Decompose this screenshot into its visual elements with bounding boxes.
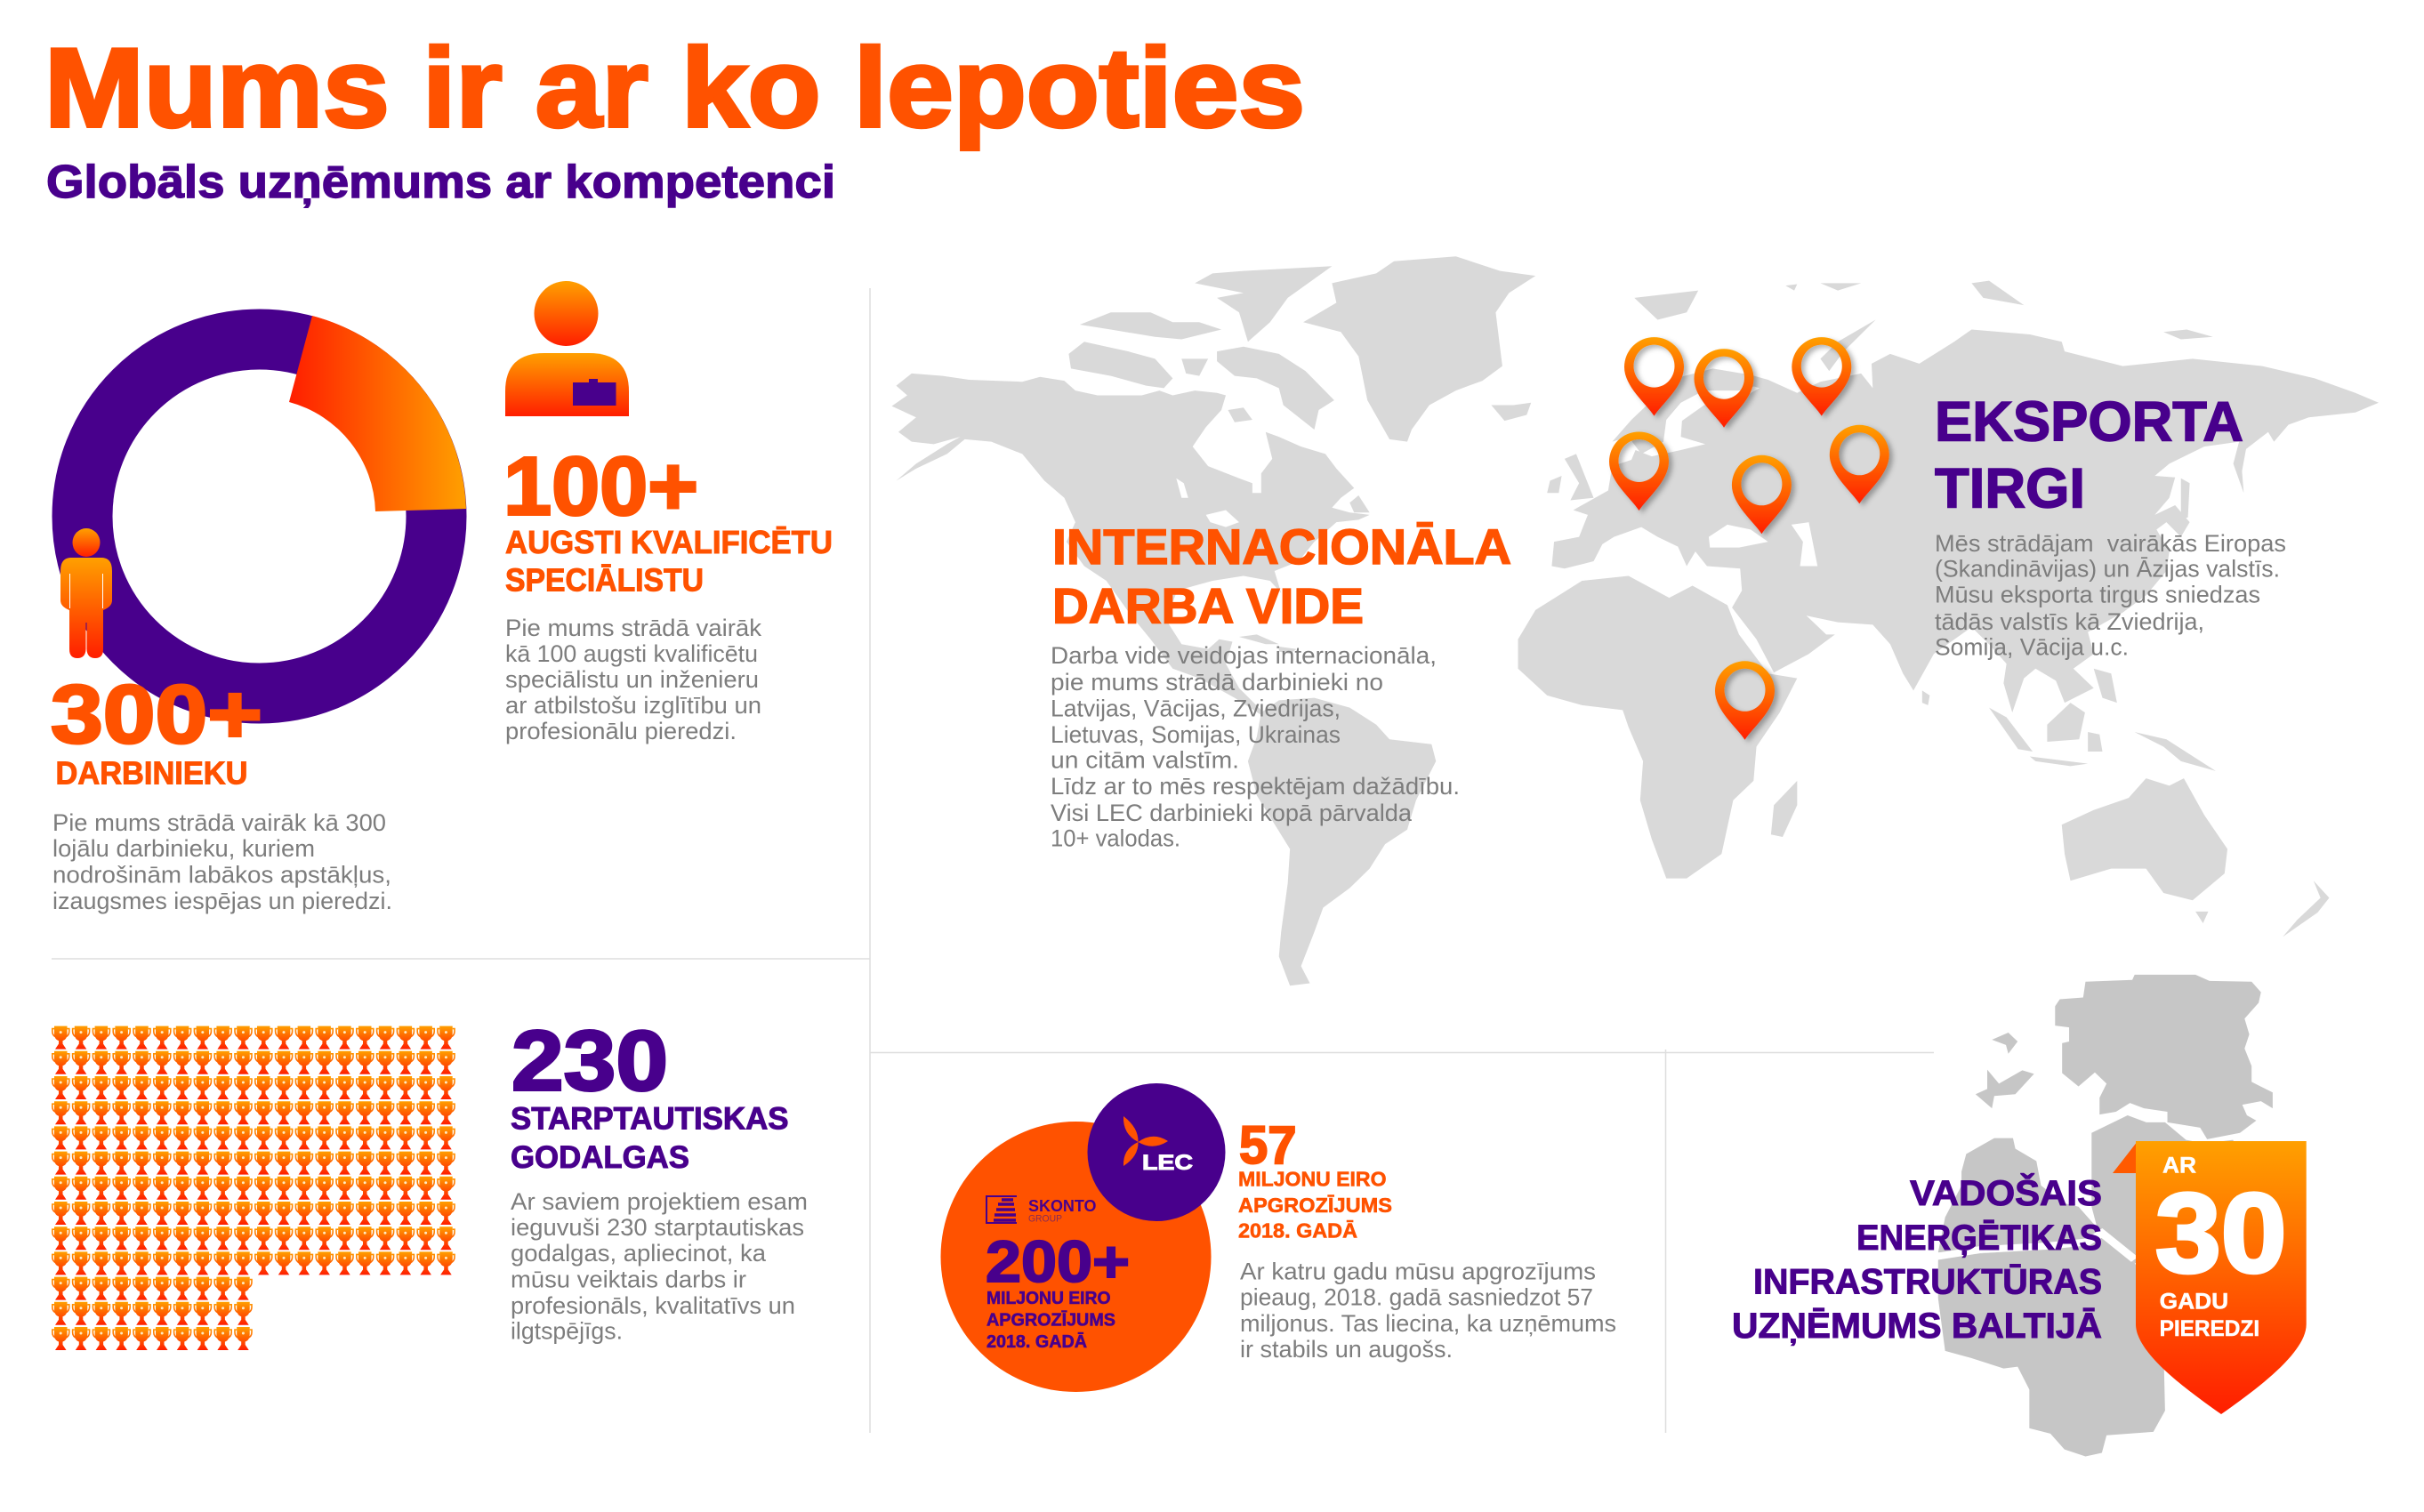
text: specialists description bbox=[505, 615, 762, 744]
badge: 30 years: 30 bbox=[2155, 1170, 2286, 1296]
heading: leading company bbox=[1732, 1172, 2102, 1346]
text: specialists description: ar atbilstošu izglītību un bbox=[505, 692, 761, 719]
text: work environment description bbox=[1051, 642, 1460, 851]
label: awards: GODALGAS bbox=[511, 1140, 689, 1175]
label: specialists: AUGSTI KVALIFICĒTU bbox=[505, 524, 833, 560]
panel: baltic leader bbox=[1732, 1141, 2307, 1414]
logo: lec wordmark: LEC bbox=[1142, 1151, 1193, 1175]
text: turnover description bbox=[1240, 1259, 1616, 1363]
logo: skonto group: SKONTO bbox=[1028, 1197, 1096, 1215]
heading bbox=[1052, 519, 1511, 634]
text: work environment description: Lietuvas, Somijas, Ukrainas bbox=[1051, 721, 1341, 748]
number: 200+: 200+ bbox=[986, 1228, 1130, 1294]
number: 230: 230 bbox=[511, 1014, 668, 1108]
heading: leading company: VADOŠAIS bbox=[1910, 1172, 2102, 1213]
heading: leading company: INFRASTRUKTŪRAS bbox=[1753, 1262, 2102, 1301]
world map bbox=[891, 256, 2379, 985]
text: specialists description: speciālistu un inženieru bbox=[505, 666, 759, 693]
trophy grid bbox=[52, 1026, 455, 1350]
text: export description: (Skandināvijas) un Āzijas valstīs. bbox=[1935, 556, 2280, 583]
text: work environment description: Līdz ar to mēs respektējam dažādību. bbox=[1051, 773, 1460, 800]
baltic map bbox=[1936, 975, 2273, 1457]
text: employees description: lojālu darbinieku, kuriem bbox=[52, 835, 315, 862]
text: employees description: Pie mums strādā vairāk kā 300 bbox=[52, 809, 386, 836]
text: export description: Somija, Vācija u.c. bbox=[1935, 633, 2129, 660]
label: lec turnover: 2018. GADĀ bbox=[1238, 1219, 1357, 1243]
label: darbinieku: DARBINIEKU bbox=[55, 754, 247, 792]
badge: 30 years: GADU bbox=[2160, 1289, 2228, 1314]
panel: awards bbox=[52, 1014, 808, 1350]
panel: turnover bbox=[941, 1083, 1616, 1392]
text: awards description: mūsu veiktais darbs ir bbox=[511, 1267, 746, 1293]
logo: skonto group bbox=[987, 1196, 1096, 1225]
text: awards description: ilgtspējīgs. bbox=[511, 1318, 623, 1345]
skonto circle bbox=[941, 1122, 1212, 1392]
text: turnover description: ir stabils un augošs. bbox=[1240, 1336, 1453, 1363]
label: specialists: SPECIĀLISTU bbox=[505, 562, 704, 598]
text: awards description: Ar saviem projektiem esam bbox=[511, 1188, 808, 1215]
number: 300+: 300+ bbox=[51, 668, 262, 760]
badge: 30 years: AR bbox=[2162, 1153, 2196, 1178]
label: lec turnover: MILJONU EIRO bbox=[1238, 1167, 1386, 1190]
text: employees description: izaugsmes iespējas un pieredzi. bbox=[52, 888, 392, 914]
heading: INTERNACIONĀLA bbox=[1052, 519, 1511, 575]
heading: leading company: ENERĢĒTIKAS bbox=[1856, 1218, 2102, 1258]
title: Mums ir ar ko lepoties bbox=[44, 25, 1305, 150]
text: specialists description: profesionālu pieredzi. bbox=[505, 718, 737, 744]
text: employees description: nodrošinām labākos apstākļus, bbox=[52, 861, 391, 888]
label: lec turnover: APGROZĪJUMS bbox=[1238, 1194, 1392, 1217]
heading bbox=[1935, 391, 2243, 520]
subtitle: Globāls uzņēmums ar kompetenci bbox=[46, 157, 835, 208]
logo: lec turbine bbox=[1123, 1116, 1168, 1166]
text: awards description: godalgas, apliecinot, ka bbox=[511, 1240, 767, 1267]
badge: 30 years bbox=[2113, 1141, 2307, 1414]
icon: person bbox=[60, 528, 112, 658]
text: specialists description: kā 100 augsti kvalificētu bbox=[505, 640, 758, 667]
label: awards: STARPTAUTISKAS bbox=[511, 1101, 788, 1137]
text: work environment description: un citām valstīm. bbox=[1051, 747, 1239, 774]
label: group turnover: 2018. GADĀ bbox=[987, 1332, 1087, 1352]
logo: skonto group: GROUP bbox=[1028, 1214, 1062, 1225]
text: awards description: ieguvuši 230 starptautiskas bbox=[511, 1214, 804, 1241]
heading: TIRGI bbox=[1935, 458, 2085, 520]
text: export description: Mēs strādājam vairākās Eiropas bbox=[1935, 530, 2286, 557]
panel: employees bbox=[51, 316, 466, 914]
text: turnover description: pieaug, 2018. gadā sasniedzot 57 bbox=[1240, 1283, 1593, 1310]
badge: 30 years: PIEREDZI bbox=[2160, 1316, 2259, 1341]
panel: specialists bbox=[503, 281, 833, 744]
text: work environment description: Darba vide veidojas internacionāla, bbox=[1051, 642, 1437, 669]
text: awards description bbox=[511, 1188, 808, 1345]
label: awards bbox=[511, 1101, 788, 1175]
heading: DARBA VIDE bbox=[1052, 578, 1364, 634]
map pins bbox=[1609, 337, 1889, 740]
icon: specialist with briefcase bbox=[505, 281, 629, 416]
text: work environment description: 10+ valodas. bbox=[1051, 824, 1180, 851]
text: specialists description: Pie mums strādā vairāk bbox=[505, 615, 762, 641]
text: employees description bbox=[52, 809, 392, 914]
text: work environment description: pie mums strādā darbinieki no bbox=[1051, 669, 1383, 696]
text: work environment description: Latvijas, Vācijas, Zviedrijas, bbox=[1051, 696, 1341, 722]
heading: EKSPORTA bbox=[1935, 391, 2243, 454]
panel: export markets bbox=[1935, 391, 2286, 660]
number: 100+: 100+ bbox=[503, 439, 698, 532]
panel: international work environment bbox=[1051, 519, 1511, 851]
text: export description: Mūsu eksporta tirgus sniedzas bbox=[1935, 582, 2260, 608]
text: awards description: profesionāls, kvalitatīvs un bbox=[511, 1292, 795, 1319]
lec circle bbox=[1087, 1083, 1226, 1221]
text: work environment description: Visi LEC darbinieki kopā pārvalda bbox=[1051, 800, 1413, 826]
number: 57: 57 bbox=[1239, 1115, 1297, 1175]
text: export description bbox=[1935, 530, 2286, 660]
label: group turnover: APGROZĪJUMS bbox=[987, 1311, 1115, 1331]
heading: leading company: UZŅĒMUMS BALTIJĀ bbox=[1732, 1307, 2102, 1346]
label: group turnover bbox=[987, 1289, 1115, 1352]
label: specialists bbox=[505, 524, 833, 598]
donut chart bbox=[82, 316, 466, 694]
label: group turnover: MILJONU EIRO bbox=[987, 1289, 1110, 1308]
text: turnover description: Ar katru gadu mūsu apgrozījums bbox=[1240, 1259, 1596, 1285]
label: lec turnover bbox=[1238, 1167, 1392, 1243]
text: export description: tādās valstīs kā Zviedrija, bbox=[1935, 608, 2204, 635]
text: turnover description: miljonus. Tas liecina, ka uzņēmums bbox=[1240, 1310, 1616, 1337]
